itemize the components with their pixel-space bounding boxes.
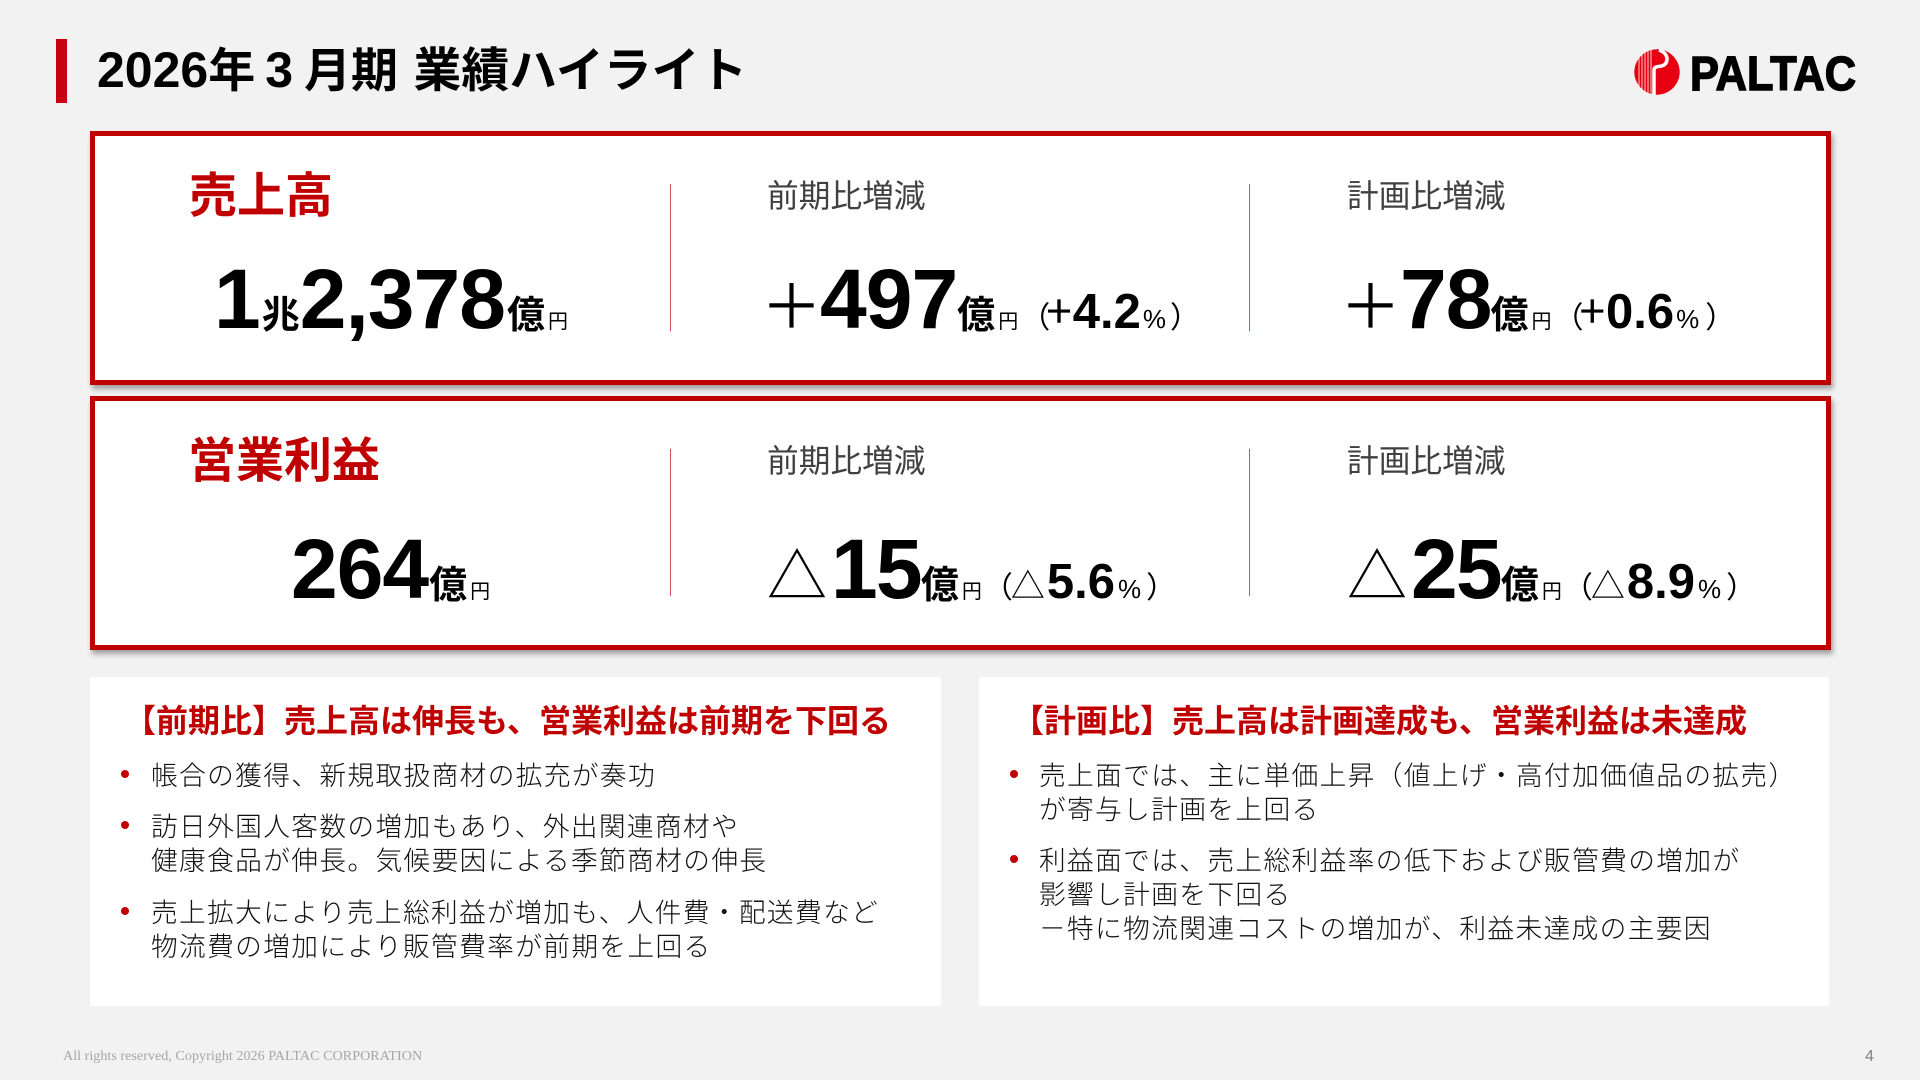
panel: year-on-year commentary [90, 677, 941, 1006]
sales plan value: ＋78億円（+0.6%） [1340, 252, 1735, 346]
bullet 2 [121, 805, 767, 878]
bullet 1: 帳合の獲得、新規取扱商材の拡充が奏功 [151, 754, 656, 793]
title: 2026年3月期 業績ハイライト [97, 32, 747, 101]
profit plan value: △25億円（△8.9%） [1347, 522, 1756, 616]
divider [670, 184, 671, 331]
icon: logo mark [1634, 49, 1680, 95]
profit YoY value: △15億円（△5.6%） [767, 522, 1176, 616]
panel heading: 【計画比】売上高は計画達成も、営業利益は未達成 [1012, 696, 1747, 742]
panel: operating profit [90, 396, 1831, 650]
bullet 3: 物流費の増加により販管費率が前期を上回る [151, 925, 712, 964]
sales YoY value: ＋497億円（+4.2%） [761, 252, 1200, 346]
profit value: 264億円 [291, 522, 490, 616]
sales plan label: 計画比増減 [1347, 171, 1505, 217]
heading: operating profit: 営業利益 [188, 421, 380, 491]
bullet 1 [1010, 754, 1797, 827]
divider [670, 449, 671, 596]
bullet 2: 健康食品が伸長。気候要因による季節商材の伸長 [151, 839, 767, 878]
page number: 4 [1865, 1048, 1874, 1065]
bullet 1: 売上面では、主に単価上昇（値上げ・高付加価値品の拡売） [1039, 754, 1797, 793]
bullet 1: が寄与し計画を上回る [1039, 788, 1320, 827]
profit YoY label: 前期比増減 [767, 436, 925, 482]
bullet 2 [1010, 839, 1740, 946]
profit plan label: 計画比増減 [1347, 436, 1505, 482]
bullet 2: －特に物流関連コストの増加が、利益未達成の主要因 [1039, 907, 1712, 946]
panel: versus plan commentary [979, 677, 1829, 1006]
bullet 2: 影響し計画を下回る [1039, 873, 1292, 912]
bullet 2: 訪日外国人客数の増加もあり、外出関連商材や [151, 805, 739, 844]
sales YoY label: 前期比増減 [767, 171, 925, 217]
bullet 3: 売上拡大により売上総利益が増加も、人件費・配送費など [151, 891, 879, 930]
bullet 2: 利益面では、売上総利益率の低下および販管費の増加が [1039, 839, 1740, 878]
divider [1249, 184, 1250, 331]
panel: net sales [90, 131, 1831, 385]
divider [1249, 449, 1250, 596]
panel heading: 【前期比】売上高は伸長も、営業利益は前期を下回る [124, 696, 891, 742]
bullet 3 [121, 891, 879, 964]
logo: PALTAC [1634, 48, 1856, 99]
sales value: 1兆2,378億円 [214, 252, 568, 346]
title accent bar [56, 39, 67, 103]
heading: net sales: 売上高 [189, 156, 333, 226]
footer copyright: All rights reserved, Copyright 2026 PALTAC CORPORATION [63, 1048, 422, 1064]
